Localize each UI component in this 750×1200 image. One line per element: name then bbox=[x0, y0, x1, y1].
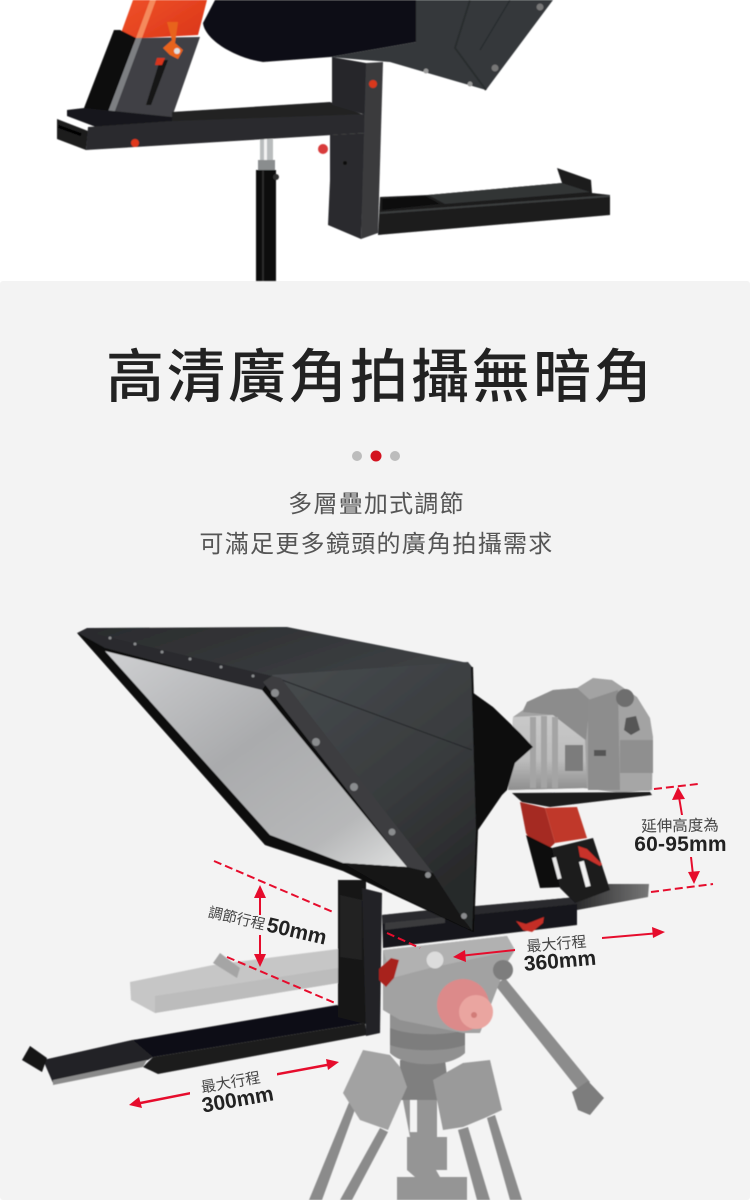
camera hood cloth bbox=[203, 0, 416, 62]
label bbox=[634, 816, 727, 856]
subtitle: 可滿足更多鏡頭的廣角拍攝需求 bbox=[199, 531, 554, 558]
camera hood cloth bbox=[470, 692, 533, 830]
camera riser bbox=[520, 802, 610, 903]
frame top strip bbox=[78, 632, 272, 690]
label bbox=[522, 933, 597, 976]
lower tablet arm bbox=[378, 168, 610, 235]
lower arm slider bbox=[22, 1037, 177, 1085]
black rear plate bbox=[84, 30, 136, 120]
hood side panel bbox=[272, 662, 477, 932]
rear camera rail bbox=[382, 884, 649, 948]
ghosted arm position bbox=[130, 949, 338, 1013]
label: 延伸高度為 bbox=[641, 816, 719, 836]
camera plate bbox=[512, 792, 652, 807]
bowl neck bbox=[390, 1005, 465, 1064]
red riser bbox=[112, 0, 207, 59]
product photo: top bracket close-up bbox=[57, 0, 610, 281]
annotation: max travel 360mm bbox=[453, 927, 665, 976]
tripod spider bbox=[343, 1050, 502, 1130]
arrows bbox=[453, 927, 665, 962]
annotation: max travel 300mm bbox=[129, 1059, 339, 1118]
pole bbox=[256, 139, 279, 281]
dashed guides bbox=[214, 861, 420, 1003]
rail knob bbox=[516, 917, 544, 932]
screen frame bbox=[77, 633, 473, 932]
label: 360mm bbox=[523, 947, 597, 976]
slotted grey plate bbox=[105, 37, 200, 120]
label: 60-95mm bbox=[634, 833, 727, 856]
vertical column bbox=[318, 57, 383, 239]
annotation: adjustment travel 50mm bbox=[206, 861, 420, 1003]
subtitle: 多層疊加式調節 bbox=[288, 491, 465, 518]
orange knob bbox=[163, 22, 183, 59]
riser knob bbox=[578, 846, 602, 866]
hood panel bbox=[330, 0, 553, 90]
prompter hood top panel bbox=[77, 627, 472, 680]
label: 調節行程 bbox=[206, 903, 267, 934]
pan handle bbox=[495, 978, 604, 1115]
glass screen bbox=[105, 651, 407, 867]
fluid head bbox=[383, 936, 515, 1033]
lower arm bbox=[133, 1005, 367, 1074]
hood lower edge bbox=[343, 863, 470, 930]
camera bbox=[508, 678, 653, 793]
label: 300mm bbox=[200, 1082, 275, 1118]
vertical column bbox=[338, 880, 382, 1036]
pagination dots bbox=[352, 450, 400, 462]
double arrow bbox=[254, 885, 266, 967]
arrows bbox=[129, 1059, 339, 1108]
label bbox=[206, 900, 329, 950]
label: 50mm bbox=[264, 914, 329, 950]
label: 最大行程 bbox=[526, 933, 587, 956]
frame side strip bbox=[263, 676, 470, 930]
dashed guides bbox=[651, 784, 713, 892]
annotation: extended height 60-95mm bbox=[634, 784, 727, 892]
label: 最大行程 bbox=[200, 1069, 262, 1097]
teleprompter product photo bbox=[0, 531, 653, 1200]
horizontal bar bbox=[57, 114, 366, 150]
subtitle bbox=[199, 491, 554, 558]
frame screws bbox=[108, 636, 467, 919]
camera rail top bbox=[172, 102, 366, 128]
slider base bbox=[67, 108, 172, 127]
title: 高清廣角拍攝無暗角 bbox=[106, 345, 655, 410]
arrows bbox=[672, 787, 700, 884]
column knob bbox=[379, 958, 399, 987]
tripod legs bbox=[309, 1085, 522, 1200]
label bbox=[198, 1068, 275, 1118]
